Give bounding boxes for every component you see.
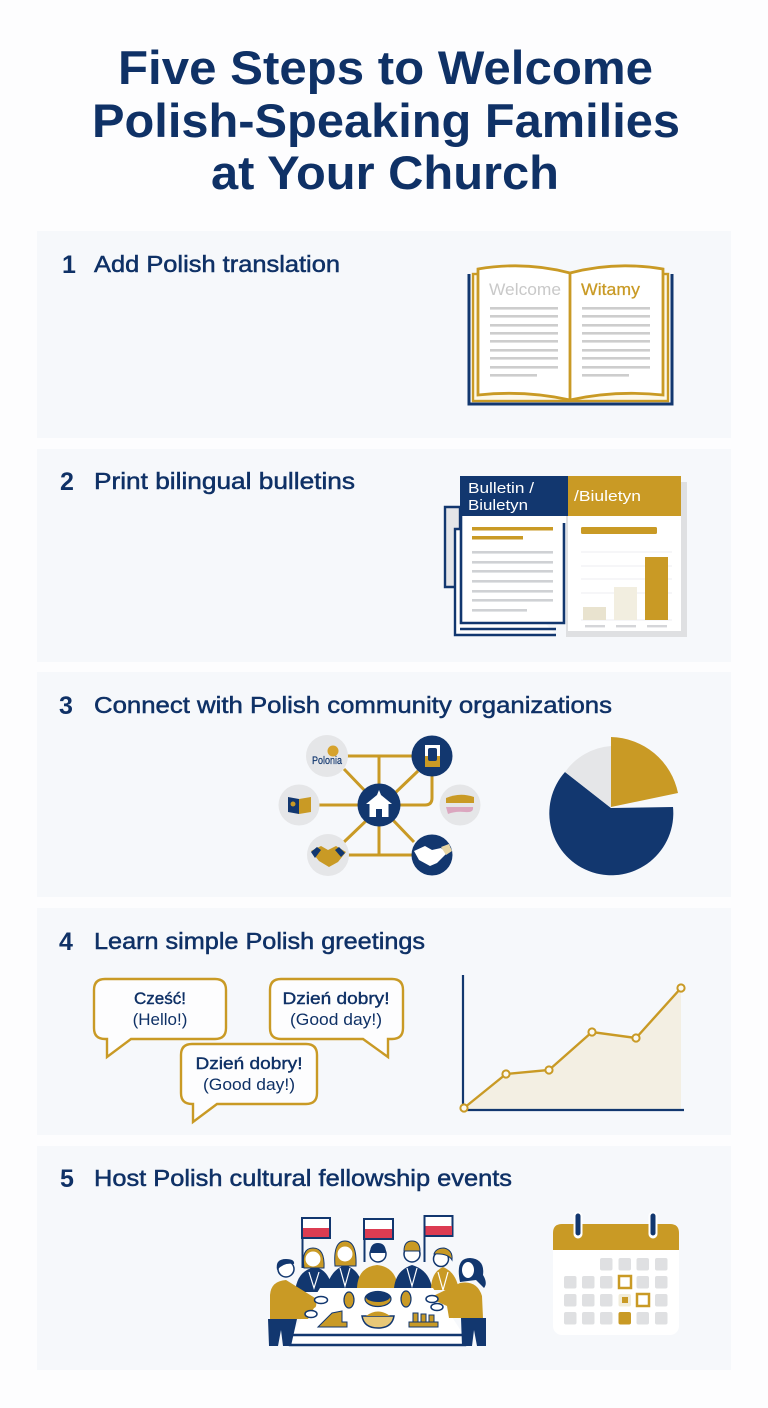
- icon: white handshake: [414, 844, 452, 866]
- speech bubble: Dzień dobry center: (Good day!): [203, 1075, 295, 1094]
- title: Five Steps to Welcome: [118, 41, 653, 94]
- speech bubble: Dzień dobry right: [270, 979, 403, 1057]
- icon: bilingual bulletin: /Biuletyn: [574, 489, 641, 505]
- icon: open book: Witamy: [581, 280, 641, 299]
- icon: open book: Welcome: [489, 280, 561, 299]
- speech bubble: Cześć: (Hello!): [133, 1010, 187, 1029]
- illustration: fellowship table: [268, 1216, 486, 1346]
- speech bubble: Cześć: [94, 979, 226, 1057]
- title: Polish-Speaking Families: [92, 94, 680, 147]
- step 1 number: 1: [62, 251, 76, 279]
- Polish flags: [302, 1216, 452, 1268]
- icon: gold handshake: [311, 846, 346, 867]
- icon: flag book: [288, 797, 311, 814]
- icon: church: [366, 790, 392, 817]
- icon: Polonia logo: [312, 746, 343, 767]
- step 3 number: 3: [59, 692, 73, 720]
- standing person right: [426, 1258, 486, 1346]
- icon: bilingual bulletin: Biuletyn: [468, 498, 528, 514]
- step 4 number: 4: [59, 928, 73, 956]
- panel: step 1: [37, 231, 731, 438]
- icon: calendar: [553, 1216, 679, 1335]
- icon: bilingual bulletin: [445, 476, 687, 637]
- network diagram: [278, 735, 480, 876]
- pie chart: [549, 737, 678, 875]
- seated people: [295, 1241, 459, 1292]
- step 4 heading: Learn simple Polish greetings: [94, 928, 425, 954]
- icon: bilingual bulletin: Bulletin /: [468, 481, 535, 497]
- speech bubble: Dzień dobry right: Dzień dobry!: [282, 989, 390, 1008]
- speech bubble: Dzień dobry right: (Good day!): [290, 1010, 382, 1029]
- step 5 heading: Host Polish cultural fellowship events: [94, 1165, 512, 1191]
- table with food: [290, 1288, 465, 1345]
- step 3 heading: Connect with Polish community organizations: [94, 692, 612, 718]
- panel: step 4: [37, 908, 731, 1135]
- speech bubble: Dzień dobry center: Dzień dobry!: [196, 1054, 302, 1073]
- speech bubble: Dzień dobry center: [181, 1044, 317, 1122]
- title: at Your Church: [211, 146, 559, 199]
- panel: step 2: [37, 449, 731, 662]
- standing person left: [268, 1259, 328, 1346]
- icon: drink card: [425, 745, 440, 767]
- icon: colored bands: [446, 795, 474, 814]
- line chart: [460, 975, 685, 1112]
- panel: step 3: [37, 672, 731, 897]
- title: [92, 41, 680, 199]
- icon: open book: [469, 266, 672, 404]
- step 2 heading: Print bilingual bulletins: [94, 468, 355, 494]
- step 1 heading: Add Polish translation: [94, 251, 340, 277]
- step 2 number: 2: [60, 468, 74, 496]
- speech bubble: Cześć: Cześć!: [134, 989, 186, 1008]
- icon: Polonia logo: Polonia: [312, 755, 343, 767]
- panel: step 5: [37, 1146, 731, 1370]
- step 5 number: 5: [60, 1165, 74, 1193]
